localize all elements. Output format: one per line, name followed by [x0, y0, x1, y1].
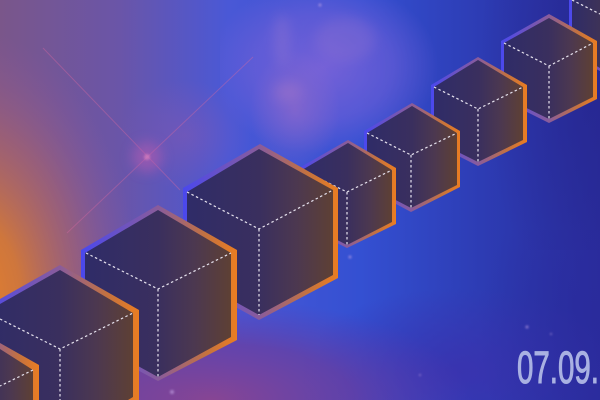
small stars — [170, 4, 552, 394]
cube 4 — [81, 205, 237, 381]
nebula clouds — [120, 0, 450, 190]
cube 10 — [569, 0, 600, 71]
cube 7 — [364, 103, 460, 212]
lens flare star — [43, 48, 253, 233]
cube 8 — [431, 57, 527, 166]
cube 3 — [0, 265, 139, 400]
cube 9 — [501, 14, 597, 123]
cube 2 — [0, 343, 39, 400]
cube 5 — [183, 144, 338, 320]
cube 6 — [299, 140, 396, 248]
